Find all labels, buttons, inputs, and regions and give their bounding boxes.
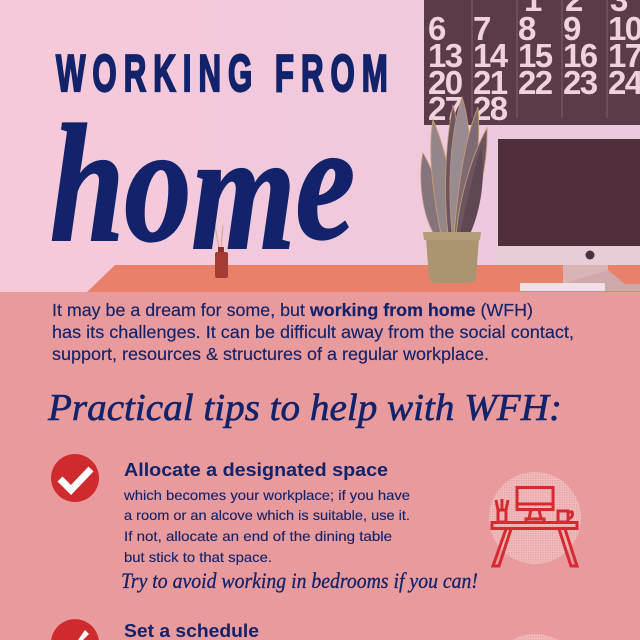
wall calendar: 9 (563, 10, 581, 47)
tip 1 body: which becomes your workplace; if you have (123, 487, 410, 503)
plant pot (423, 232, 481, 283)
wall calendar: 21 (473, 64, 508, 101)
wall calendar: 22 (518, 64, 553, 101)
tip 1 body: but stick to that space. (124, 549, 272, 565)
wall calendar: 16 (563, 37, 598, 74)
wall calendar: 27 (428, 90, 462, 127)
tip 1 body (123, 487, 410, 565)
intro paragraph: support, resources & structures of a regular workplace. (52, 344, 489, 364)
wall calendar: 15 (518, 37, 553, 74)
tip 1 script note: Try to avoid working in bedrooms if you can! (121, 568, 478, 593)
wall calendar: 20 (428, 64, 462, 101)
wall calendar: 7 (473, 10, 490, 47)
diffuser bottle (213, 215, 228, 278)
title: home: e (296, 89, 355, 275)
intro paragraph: It may be a dream for some, but working from home (WFH) (52, 300, 533, 320)
keyboard (520, 283, 605, 291)
wall calendar: 23 (563, 64, 598, 101)
icon: next tip halftone (512, 634, 558, 640)
wall calendar: 28 (473, 90, 508, 127)
photo: desk top (87, 265, 640, 292)
tip 1 body: If not, allocate an end of the dining table (124, 528, 392, 544)
heading: practical tips: Practical tips to help with WFH: (47, 387, 562, 429)
icon: check 1 (51, 454, 99, 502)
title: working from: WORKING FROM (56, 45, 388, 103)
plant (421, 97, 487, 234)
wall calendar: 6 (428, 10, 446, 47)
title: home: ho (50, 91, 227, 277)
icon: check 2 (51, 619, 99, 640)
computer monitor (496, 137, 640, 291)
wall calendar: 14 (473, 37, 509, 74)
photo background: wall (0, 0, 640, 292)
tip 1 heading: Allocate a designated space (124, 459, 388, 480)
icon: desk with computer (489, 472, 581, 566)
intro paragraph: has its challenges. It can be difficult away from the social contact, (52, 322, 574, 342)
panel: lower background (0, 292, 640, 640)
title: home: m (191, 99, 296, 285)
intro paragraph (52, 300, 574, 364)
tip 1 body: a room or an alcove which is suitable, use it. (124, 507, 410, 523)
wall calendar: 13 (428, 37, 463, 74)
wall calendar: 8 (518, 10, 536, 47)
wall calendar (424, 0, 640, 127)
